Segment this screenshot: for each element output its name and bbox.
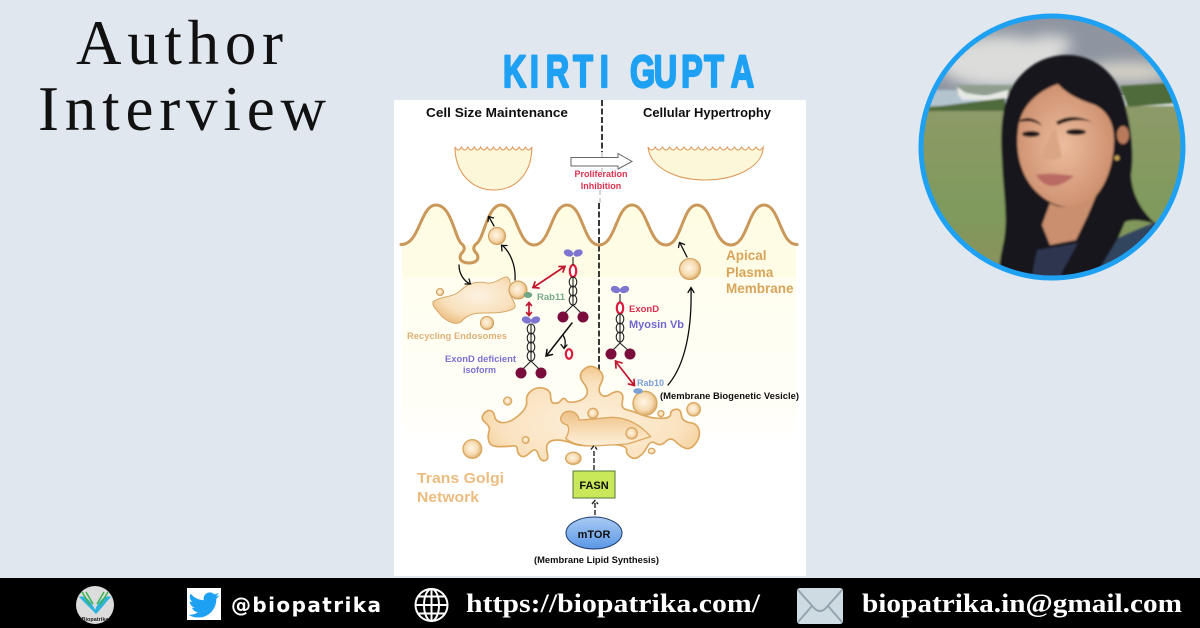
photo: jacket: [1099, 222, 1156, 266]
label: membrane biogenetic vesicle: (Membrane Biogenetic Vesicle): [660, 391, 799, 401]
divider: dashed centre line: [599, 100, 602, 376]
photo: white cliffs: [957, 87, 1008, 100]
trans Golgi network: [463, 366, 700, 464]
footer bar: [0, 578, 1200, 628]
label: trans Golgi network: [417, 470, 504, 506]
icon: small cell: [455, 147, 532, 190]
myosin: full length at Rab11: [558, 248, 588, 322]
photo: earring: [1114, 156, 1120, 160]
myosin: ExonD deficient isoform: [516, 315, 546, 378]
twitter handle: @biopatrika: [231, 593, 381, 617]
label: apical plasma membrane: Plasma: [726, 265, 774, 280]
photo: sea and cliffs: [930, 89, 1008, 108]
label: proliferation inhibition: [574, 169, 628, 191]
icon: Biopatrika logo: Biopatrika: [82, 617, 109, 623]
arrow: mTOR to FASN: [592, 500, 598, 515]
label: membrane lipid synthesis: (Membrane Lipid Synthesis): [534, 555, 659, 565]
box: FASN: [573, 471, 615, 498]
icon: globe: [416, 589, 448, 621]
Rab11 marker: Rab11: [537, 292, 566, 303]
photo: ear: [1117, 126, 1129, 144]
label: apical plasma membrane: Apical: [726, 248, 767, 263]
label: apical plasma membrane: Membrane: [726, 281, 794, 296]
panel: cell diagram: [394, 100, 806, 576]
node: mTOR: [566, 517, 622, 549]
photo: clouds: [938, 35, 1170, 88]
ExonD ring fragment: [566, 349, 572, 359]
Rab10 marker: [633, 378, 664, 394]
Rab10 marker: Rab10: [637, 378, 664, 388]
icon: envelope: [797, 588, 843, 624]
title: Author Interview: [38, 8, 326, 144]
node: mTOR: mTOR: [578, 529, 610, 541]
title: Author Interview: Author: [76, 8, 283, 78]
label: ExonD deficient isoform: ExonD deficient: [445, 354, 516, 364]
apical plasma membrane line: [401, 205, 797, 263]
label: proliferation inhibition: Proliferation: [574, 169, 628, 179]
heading: cellular hypertrophy: Cellular Hypertrophy: [643, 106, 771, 120]
icon: twitter: [187, 588, 221, 620]
myosin Vb with ExonD: [606, 285, 636, 360]
author name: KIRTI GUPTA: [503, 48, 754, 97]
email address: biopatrika.in@gmail.com: [862, 589, 1182, 618]
photo: grass field: [924, 104, 1180, 265]
label: trans Golgi network: Trans Golgi: [417, 470, 504, 487]
label: apical plasma membrane: [726, 248, 794, 296]
photo: hair: [999, 55, 1156, 285]
website url: https://biopatrika.com/: [466, 589, 761, 618]
label: recycling endosomes: Recycling Endosomes: [407, 331, 507, 341]
author photo: [915, 15, 1190, 285]
label: proliferation inhibition: Inhibition: [581, 181, 621, 191]
photo: nose shadow: [1046, 130, 1062, 160]
label: ExonD deficient isoform: [445, 354, 516, 375]
photo: hills: [925, 83, 1176, 111]
photo: sky: [936, 18, 1164, 95]
label: ExonD: ExonD: [629, 304, 659, 315]
title: Author Interview: Interview: [38, 74, 326, 144]
arrow: FASN to Golgi: [591, 446, 597, 470]
icon: enlarged cell: [648, 147, 763, 180]
heading: cell size maintenance: Cell Size Maintenance: [426, 106, 568, 120]
photo: eyes and brows: [1020, 117, 1092, 137]
label: ExonD deficient isoform: isoform: [463, 365, 496, 375]
arrows: recycling pathway: [459, 216, 694, 385]
label: Myosin Vb: Myosin Vb: [629, 319, 684, 331]
photo: cliff top: [957, 85, 1012, 95]
Rab11 marker: [524, 292, 566, 303]
vesicles: recycling pathway: [436, 228, 700, 330]
photo: ring: [921, 16, 1183, 278]
box: FASN: FASN: [579, 480, 609, 492]
photo: tee shirt: [1031, 242, 1078, 276]
cytoplasm background: [402, 205, 796, 442]
icon: Biopatrika logo: [76, 586, 114, 624]
arrow: proliferation inhibition: [571, 154, 632, 169]
photo: neck: [1042, 196, 1096, 245]
red double arrows: [526, 266, 634, 386]
photo: face: [1017, 84, 1114, 207]
recycling endosome: [433, 277, 515, 323]
label: trans Golgi network: Network: [417, 489, 480, 506]
photo: lips: [1036, 174, 1074, 186]
